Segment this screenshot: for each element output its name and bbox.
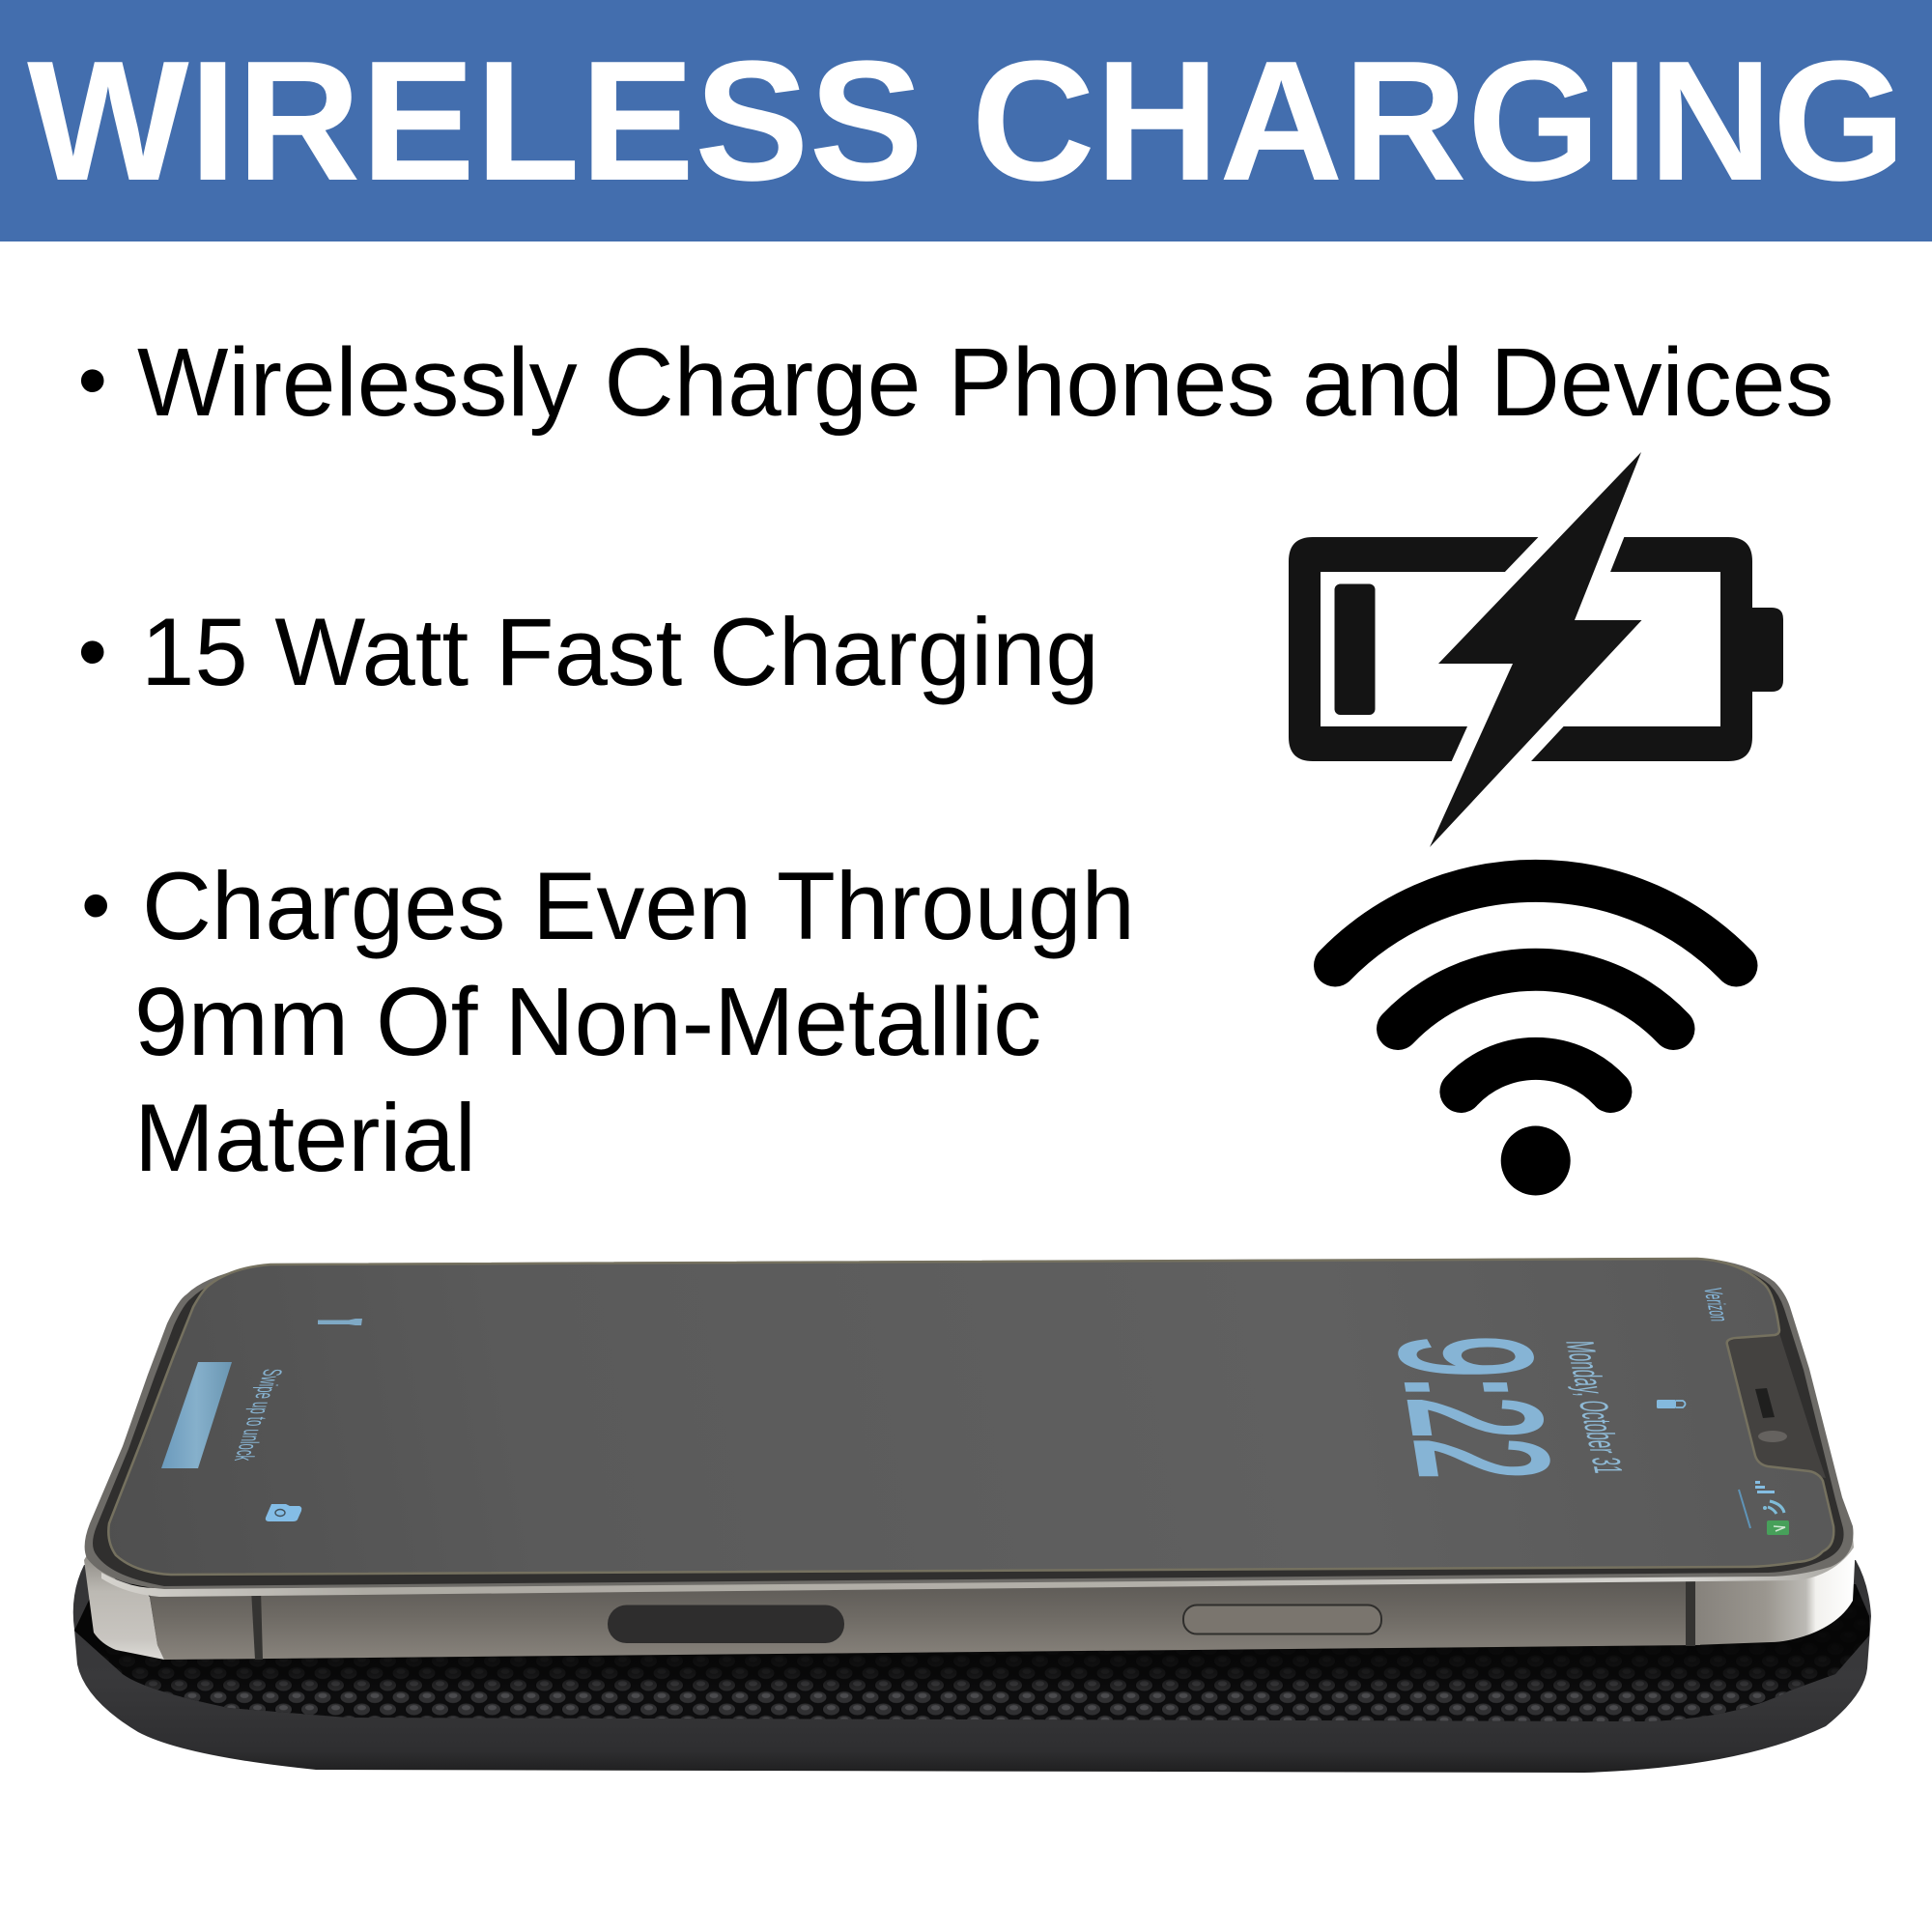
swipe text: Swipe up to unlock	[228, 1369, 287, 1461]
rim	[101, 1536, 1854, 1597]
notch area	[1727, 1333, 1826, 1478]
icon: wifi signal	[1335, 881, 1737, 1196]
bullet: charges through material: •	[81, 858, 110, 952]
swipe bar	[161, 1362, 232, 1468]
antennas	[251, 1589, 263, 1660]
bullet: 15 watt: •	[77, 605, 107, 698]
title: WIRELESS CHARGING	[27, 25, 1906, 216]
phone side	[150, 1580, 1700, 1660]
flashlight icon	[318, 1319, 362, 1325]
lock screen date: Monday, October 31	[1557, 1341, 1632, 1474]
product photo: phone on charging mat	[68, 1258, 1884, 1773]
phone frame	[84, 1258, 1855, 1660]
bullet: wirelessly charge: Wirelessly Charge Phones and Devices	[137, 328, 1833, 437]
front camera	[1758, 1431, 1787, 1442]
bullet: charges through material: Charges Even Through	[142, 853, 1135, 960]
bullet: 15 watt: 15 Watt Fast Charging	[141, 599, 1099, 706]
bullet: wirelessly charge: •	[77, 333, 107, 427]
status bar icons	[1739, 1481, 1789, 1535]
left chrome corner	[84, 1555, 164, 1660]
lock screen clock: 9:22	[1360, 1336, 1588, 1479]
charge port	[608, 1605, 844, 1643]
title banner	[0, 0, 1932, 242]
bullet: charges through material: 9mm Of Non-Metallic	[134, 968, 1041, 1076]
camera icon	[266, 1504, 301, 1521]
bullet: charges through material	[81, 853, 1135, 1192]
lock icon	[1657, 1400, 1685, 1408]
right chrome corner	[1692, 1536, 1855, 1645]
bullet: charges through material: Material	[134, 1085, 476, 1192]
earpiece	[1755, 1388, 1775, 1418]
icon: charging battery	[1289, 452, 1783, 847]
carrier: Verizon	[1697, 1288, 1733, 1321]
screen glass	[108, 1259, 1833, 1575]
front bezel	[93, 1260, 1844, 1586]
outer top face	[85, 1258, 1854, 1589]
charging mat	[68, 1560, 1884, 1773]
side button	[1183, 1605, 1381, 1634]
